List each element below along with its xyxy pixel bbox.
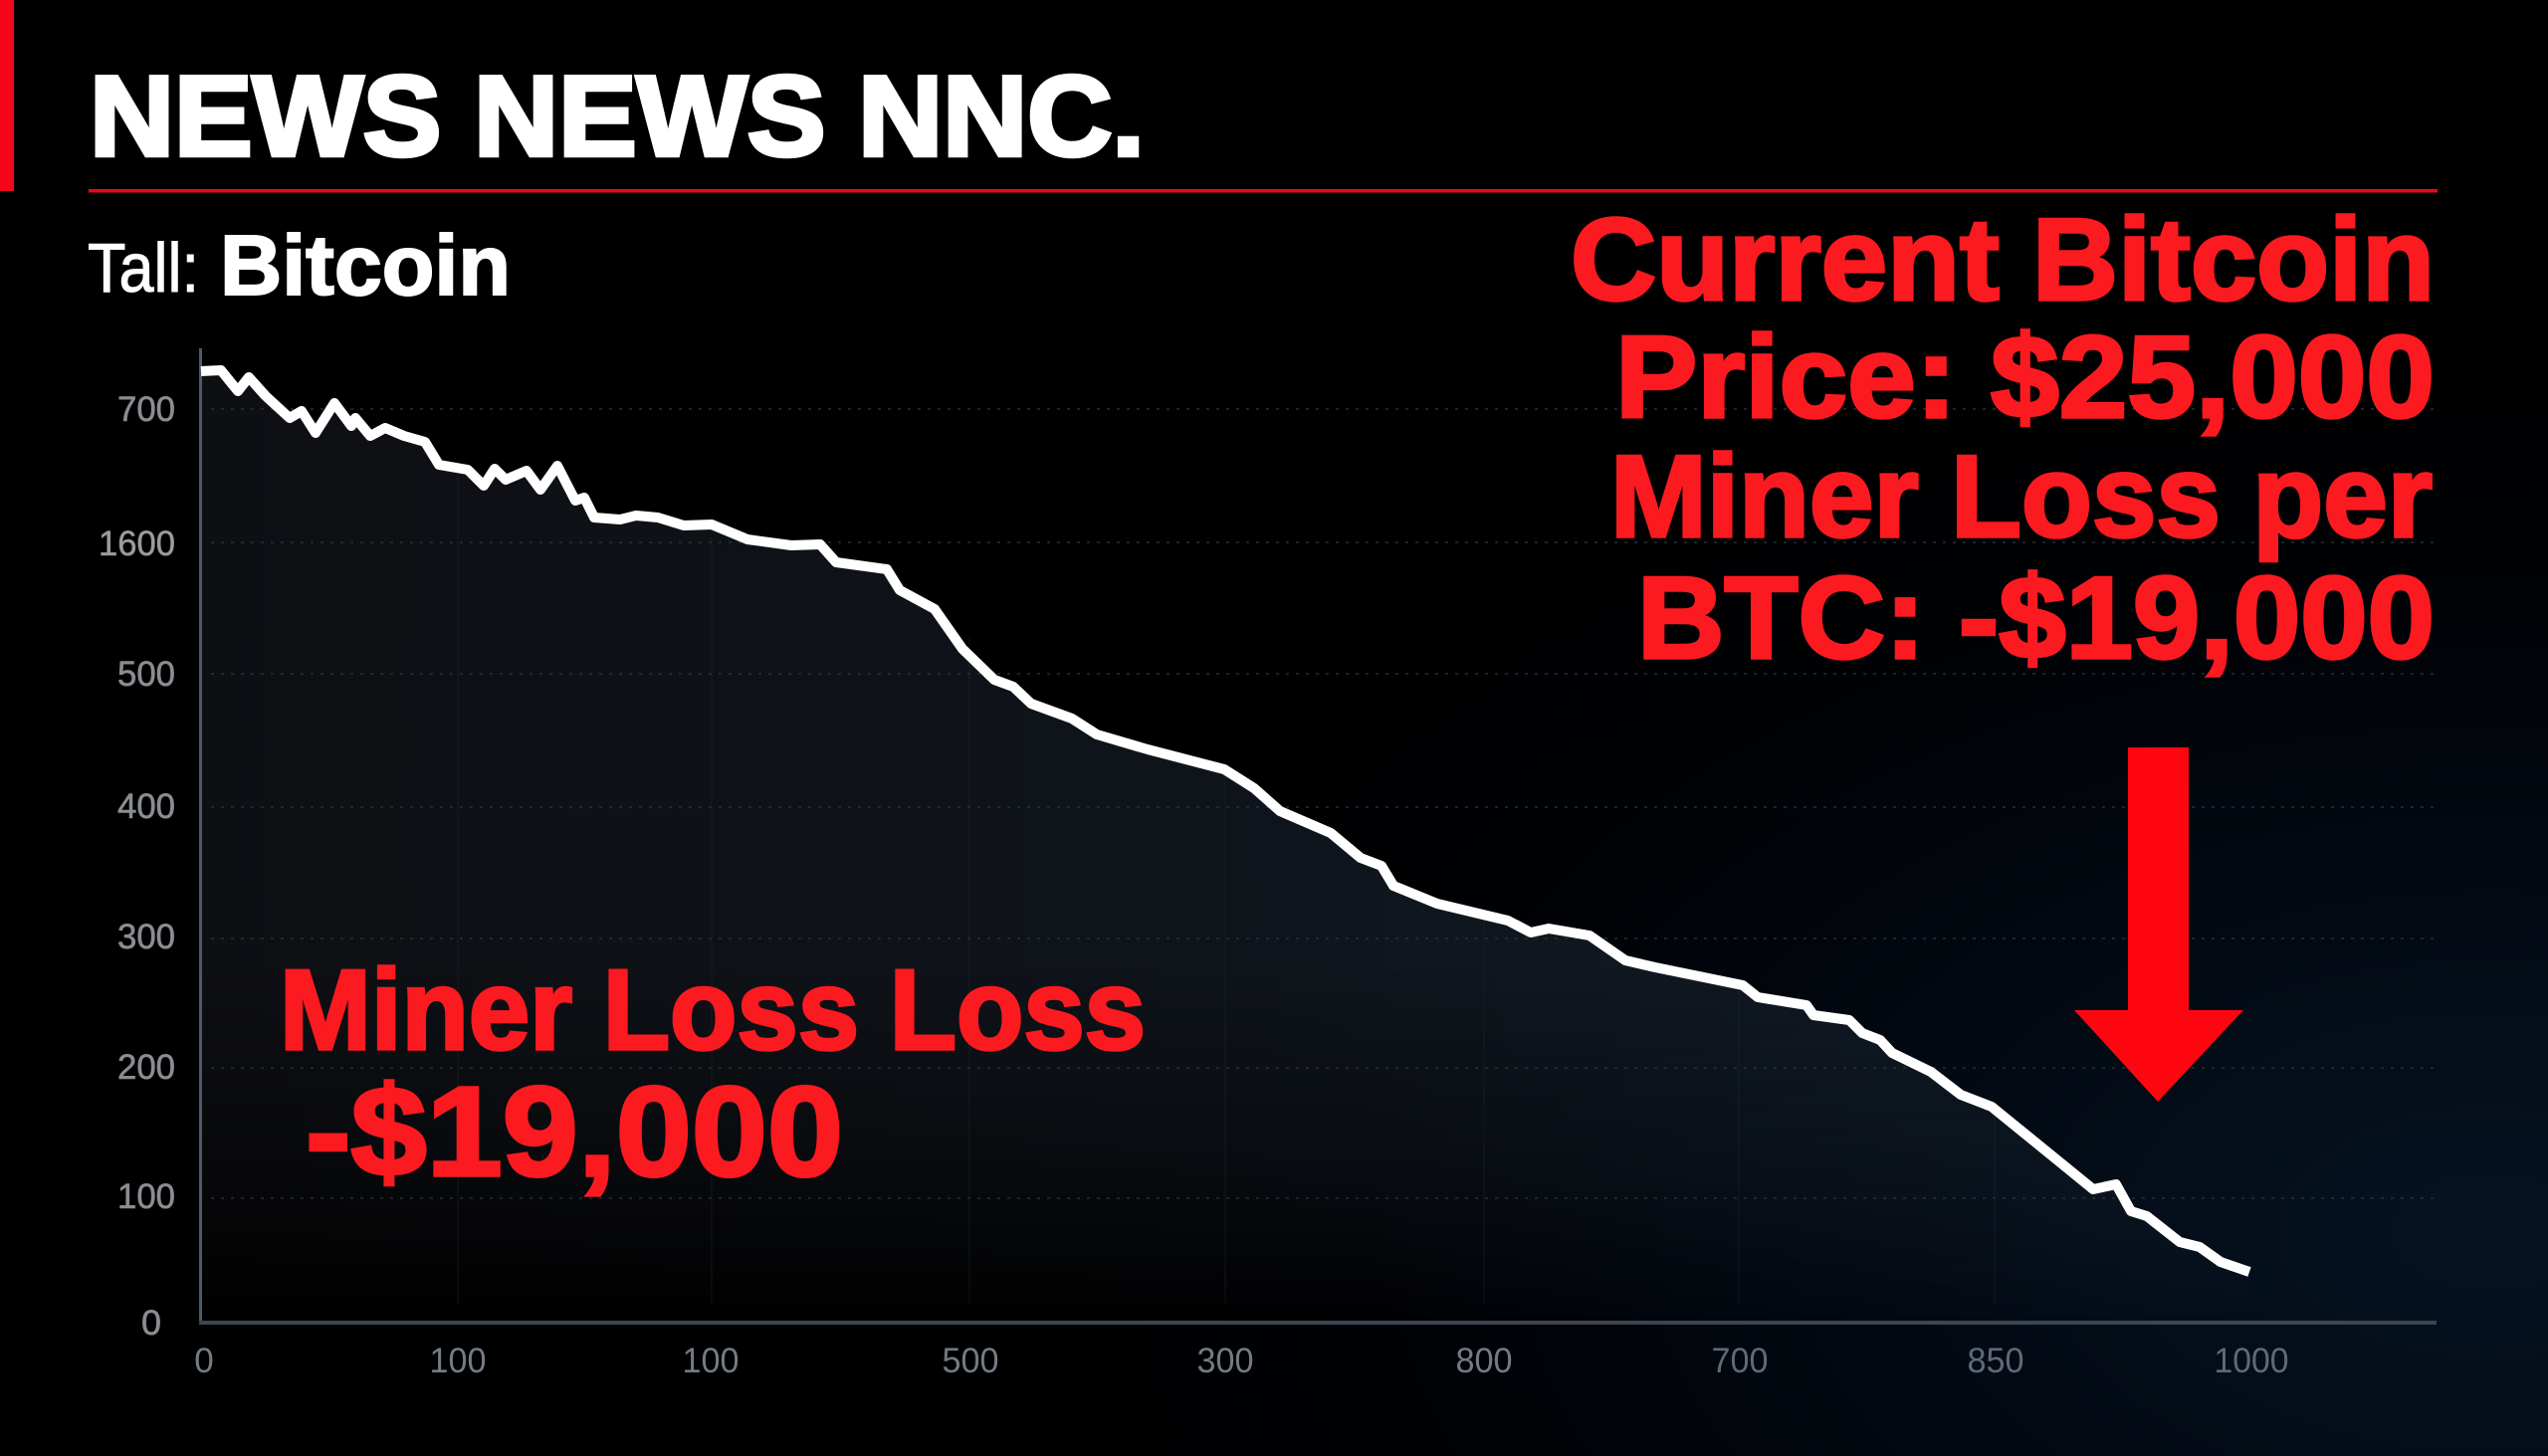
line chart	[99, 348, 2437, 1380]
x axis labels: 0	[194, 1342, 214, 1380]
y axis labels: 200	[117, 1048, 175, 1087]
x axis labels: 100	[430, 1342, 486, 1380]
subtitle keyword: Bitcoin	[220, 219, 511, 313]
y axis labels: 700	[117, 390, 175, 429]
callout line: btc loss: BTC: -$19,000	[1637, 552, 2435, 683]
x axis labels	[194, 1342, 2289, 1380]
subtitle	[88, 219, 511, 313]
callout line: current bitcoin: Current Bitcoin	[1571, 194, 2435, 324]
area under price line	[202, 375, 2060, 1230]
y axis labels	[99, 390, 175, 1343]
price line	[201, 370, 2249, 1272]
x axis labels: 300	[1196, 1342, 1254, 1380]
y axis	[199, 348, 202, 1325]
y axis labels: 300	[117, 918, 175, 956]
x axis labels: 850	[1967, 1342, 2024, 1380]
subtitle prefix: Tall:	[88, 229, 199, 307]
y axis labels: 400	[117, 787, 175, 826]
y axis labels: 1600	[99, 524, 175, 563]
callout line: price: Price: $25,000	[1615, 312, 2435, 442]
callout line: loss value: -$19,000	[306, 1061, 843, 1203]
y axis labels: 0	[141, 1304, 161, 1343]
callout line: miner loss per: Miner Loss per	[1610, 431, 2433, 561]
x axis labels: 500	[942, 1342, 999, 1380]
y axis labels: 500	[117, 655, 175, 694]
callout: current price and miner loss	[1571, 194, 2435, 683]
title: NEWS NEWS NNC.	[90, 54, 1145, 180]
callout: miner loss	[280, 947, 1146, 1203]
arrow: down	[2074, 747, 2243, 1102]
x axis labels: 800	[1455, 1342, 1513, 1380]
x axis labels: 700	[1712, 1342, 1768, 1380]
x axis labels: 100	[683, 1342, 739, 1380]
title rule	[89, 189, 2438, 193]
x axis labels: 1000	[2214, 1342, 2289, 1380]
x axis	[199, 1321, 2437, 1325]
callout line: miner loss loss: Miner Loss Loss	[280, 947, 1146, 1074]
y axis labels: 100	[117, 1177, 175, 1216]
red accent bar	[0, 0, 14, 191]
